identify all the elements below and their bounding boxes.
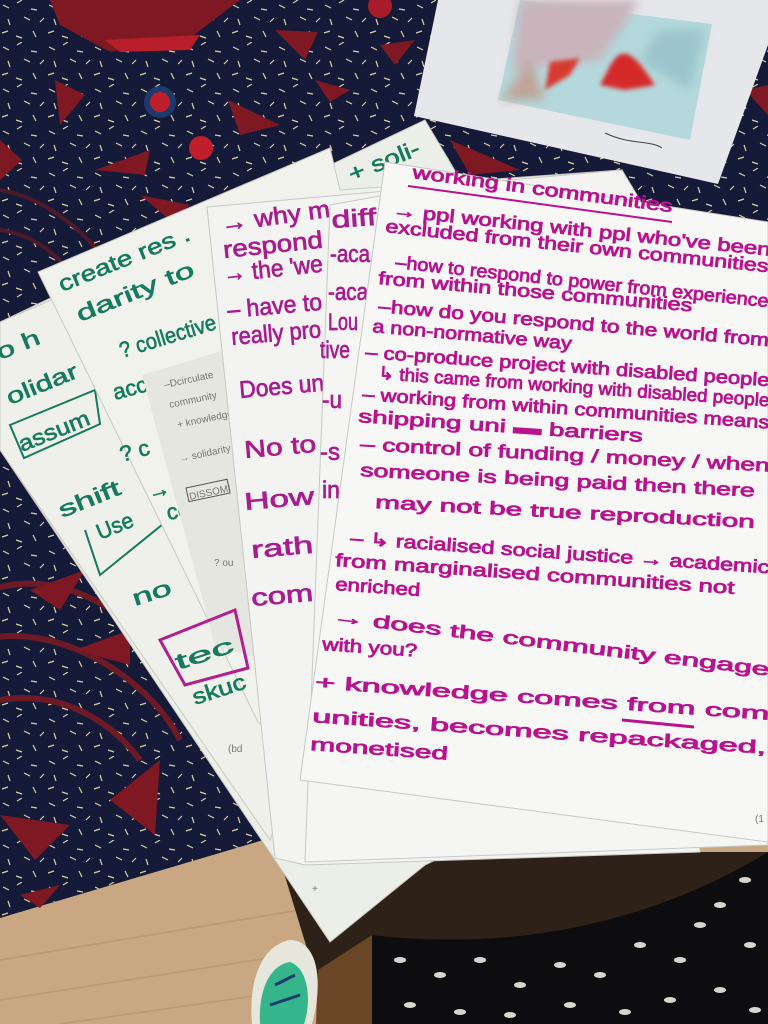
notes: + knowledge comes from com (315, 672, 768, 724)
notes: – ↳ racialised social justice → academic (350, 528, 768, 577)
notes: with you? (320, 634, 418, 661)
notes: enriched (335, 574, 421, 600)
sheet: purple notes with questions: – have to (226, 289, 323, 324)
notes: –how to respond to power from experience (395, 252, 768, 311)
front sheet: working in communities (300, 162, 768, 842)
small pasted note: ? ou (214, 558, 233, 569)
notes: ↳ this came from working with disabled people (378, 363, 768, 410)
sheet: purple notes behind front page: -aca (328, 279, 369, 306)
sheet: purple notes with questions: → why m (219, 196, 332, 238)
sheet: purple notes with questions: com (250, 580, 314, 612)
notes: from marginalised communities not (335, 550, 735, 598)
sheet: green notes left: no (129, 575, 175, 611)
notes: monetised (310, 734, 449, 764)
back sheet with green notes: + soli- (345, 135, 423, 187)
sheet: purple notes with questions: really pro (230, 316, 322, 351)
art print in plastic sleeve (414, 0, 768, 184)
person's dotted clothing (372, 852, 768, 1024)
chair back (316, 935, 372, 1024)
notes: unities, becomes repackaged, (312, 706, 767, 758)
round dark table (280, 852, 768, 1024)
notes: –how do you respond to the world from (378, 296, 768, 350)
notes: – co-produce project with disabled people (365, 342, 768, 390)
sheet: green notes, middle: ? c (117, 435, 152, 467)
sheet: green notes left: Use (93, 507, 137, 545)
sheet: purple notes behind front page: Lou (328, 309, 358, 336)
sheet: green notes, middle: cd (165, 496, 192, 525)
sheet: green notes, middle: create res . (55, 221, 194, 297)
notes: may not be true reproduction (375, 492, 755, 532)
notes: shipping uni ▬ barriers (358, 406, 643, 446)
sheet: purple notes with questions (207, 170, 700, 865)
notes: a non-normative way (372, 316, 573, 353)
notes: → does the community engage (332, 606, 768, 680)
shoe (251, 940, 318, 1024)
sheet: green notes, middle: skuc (189, 669, 249, 710)
sheet: purple notes behind front page: -s (320, 439, 340, 466)
sheet: purple notes behind front page: -aca (330, 241, 371, 268)
sheet: purple notes behind front page (305, 195, 768, 862)
heading (408, 162, 674, 222)
sheet: green notes, middle: acc (110, 372, 150, 405)
notes: – control of funding / money / when (360, 434, 768, 475)
sheet: purple notes with questions: Does un (238, 370, 325, 404)
small pasted note: → solidarity (178, 443, 232, 465)
sheet: purple notes behind front page: -u (322, 387, 342, 414)
sheet: purple notes behind front page: in (322, 477, 340, 504)
small pasted note: –Dcirculate (163, 370, 215, 391)
sheet: green notes, middle: tec (172, 632, 237, 675)
sheet: green notes, middle (38, 148, 622, 760)
sheet: green notes left (0, 293, 300, 840)
sheet: green notes, middle: (bd (228, 744, 242, 755)
small pasted note: + knowledge (176, 408, 234, 431)
notes: → ppl working with ppl who've been (392, 200, 768, 260)
sheet: purple notes with questions: respond (222, 227, 324, 264)
small pasted note (142, 350, 262, 660)
heading: working in communities (410, 162, 674, 216)
sheet: green notes, middle: ? collective (116, 310, 219, 363)
sheet: green notes, middle: → (145, 475, 173, 505)
sheet: purple notes with questions: How (243, 483, 316, 516)
notes: someone is being paid then there (360, 460, 755, 501)
sheet: purple notes behind front page: diff (331, 204, 378, 234)
sheet: purple notes with questions: rath (250, 532, 314, 564)
notes (310, 200, 768, 764)
sheet: purple notes with questions: No to (243, 431, 317, 464)
small pasted note: community (168, 390, 218, 411)
notes: from within those communities (378, 268, 693, 315)
sheet: green notes left: olidar (3, 358, 81, 410)
sheet: green notes, middle: darity to (73, 257, 198, 327)
sheet: green notes left: assum (15, 405, 93, 457)
sheet: green notes left: shift (55, 475, 124, 523)
sheet: green notes, middle: ? (205, 558, 217, 583)
small pasted note: DISSOMI (188, 483, 232, 503)
sheet: purple notes with questions: → the 'we (222, 251, 324, 288)
front sheet: working in communities: (1 (755, 814, 764, 825)
back sheet with green notes: + (312, 884, 318, 895)
sheet: purple notes behind front page: tive (320, 337, 350, 364)
notes: – working from within communities means (362, 384, 768, 432)
notes: excluded from their own communities (385, 216, 768, 276)
